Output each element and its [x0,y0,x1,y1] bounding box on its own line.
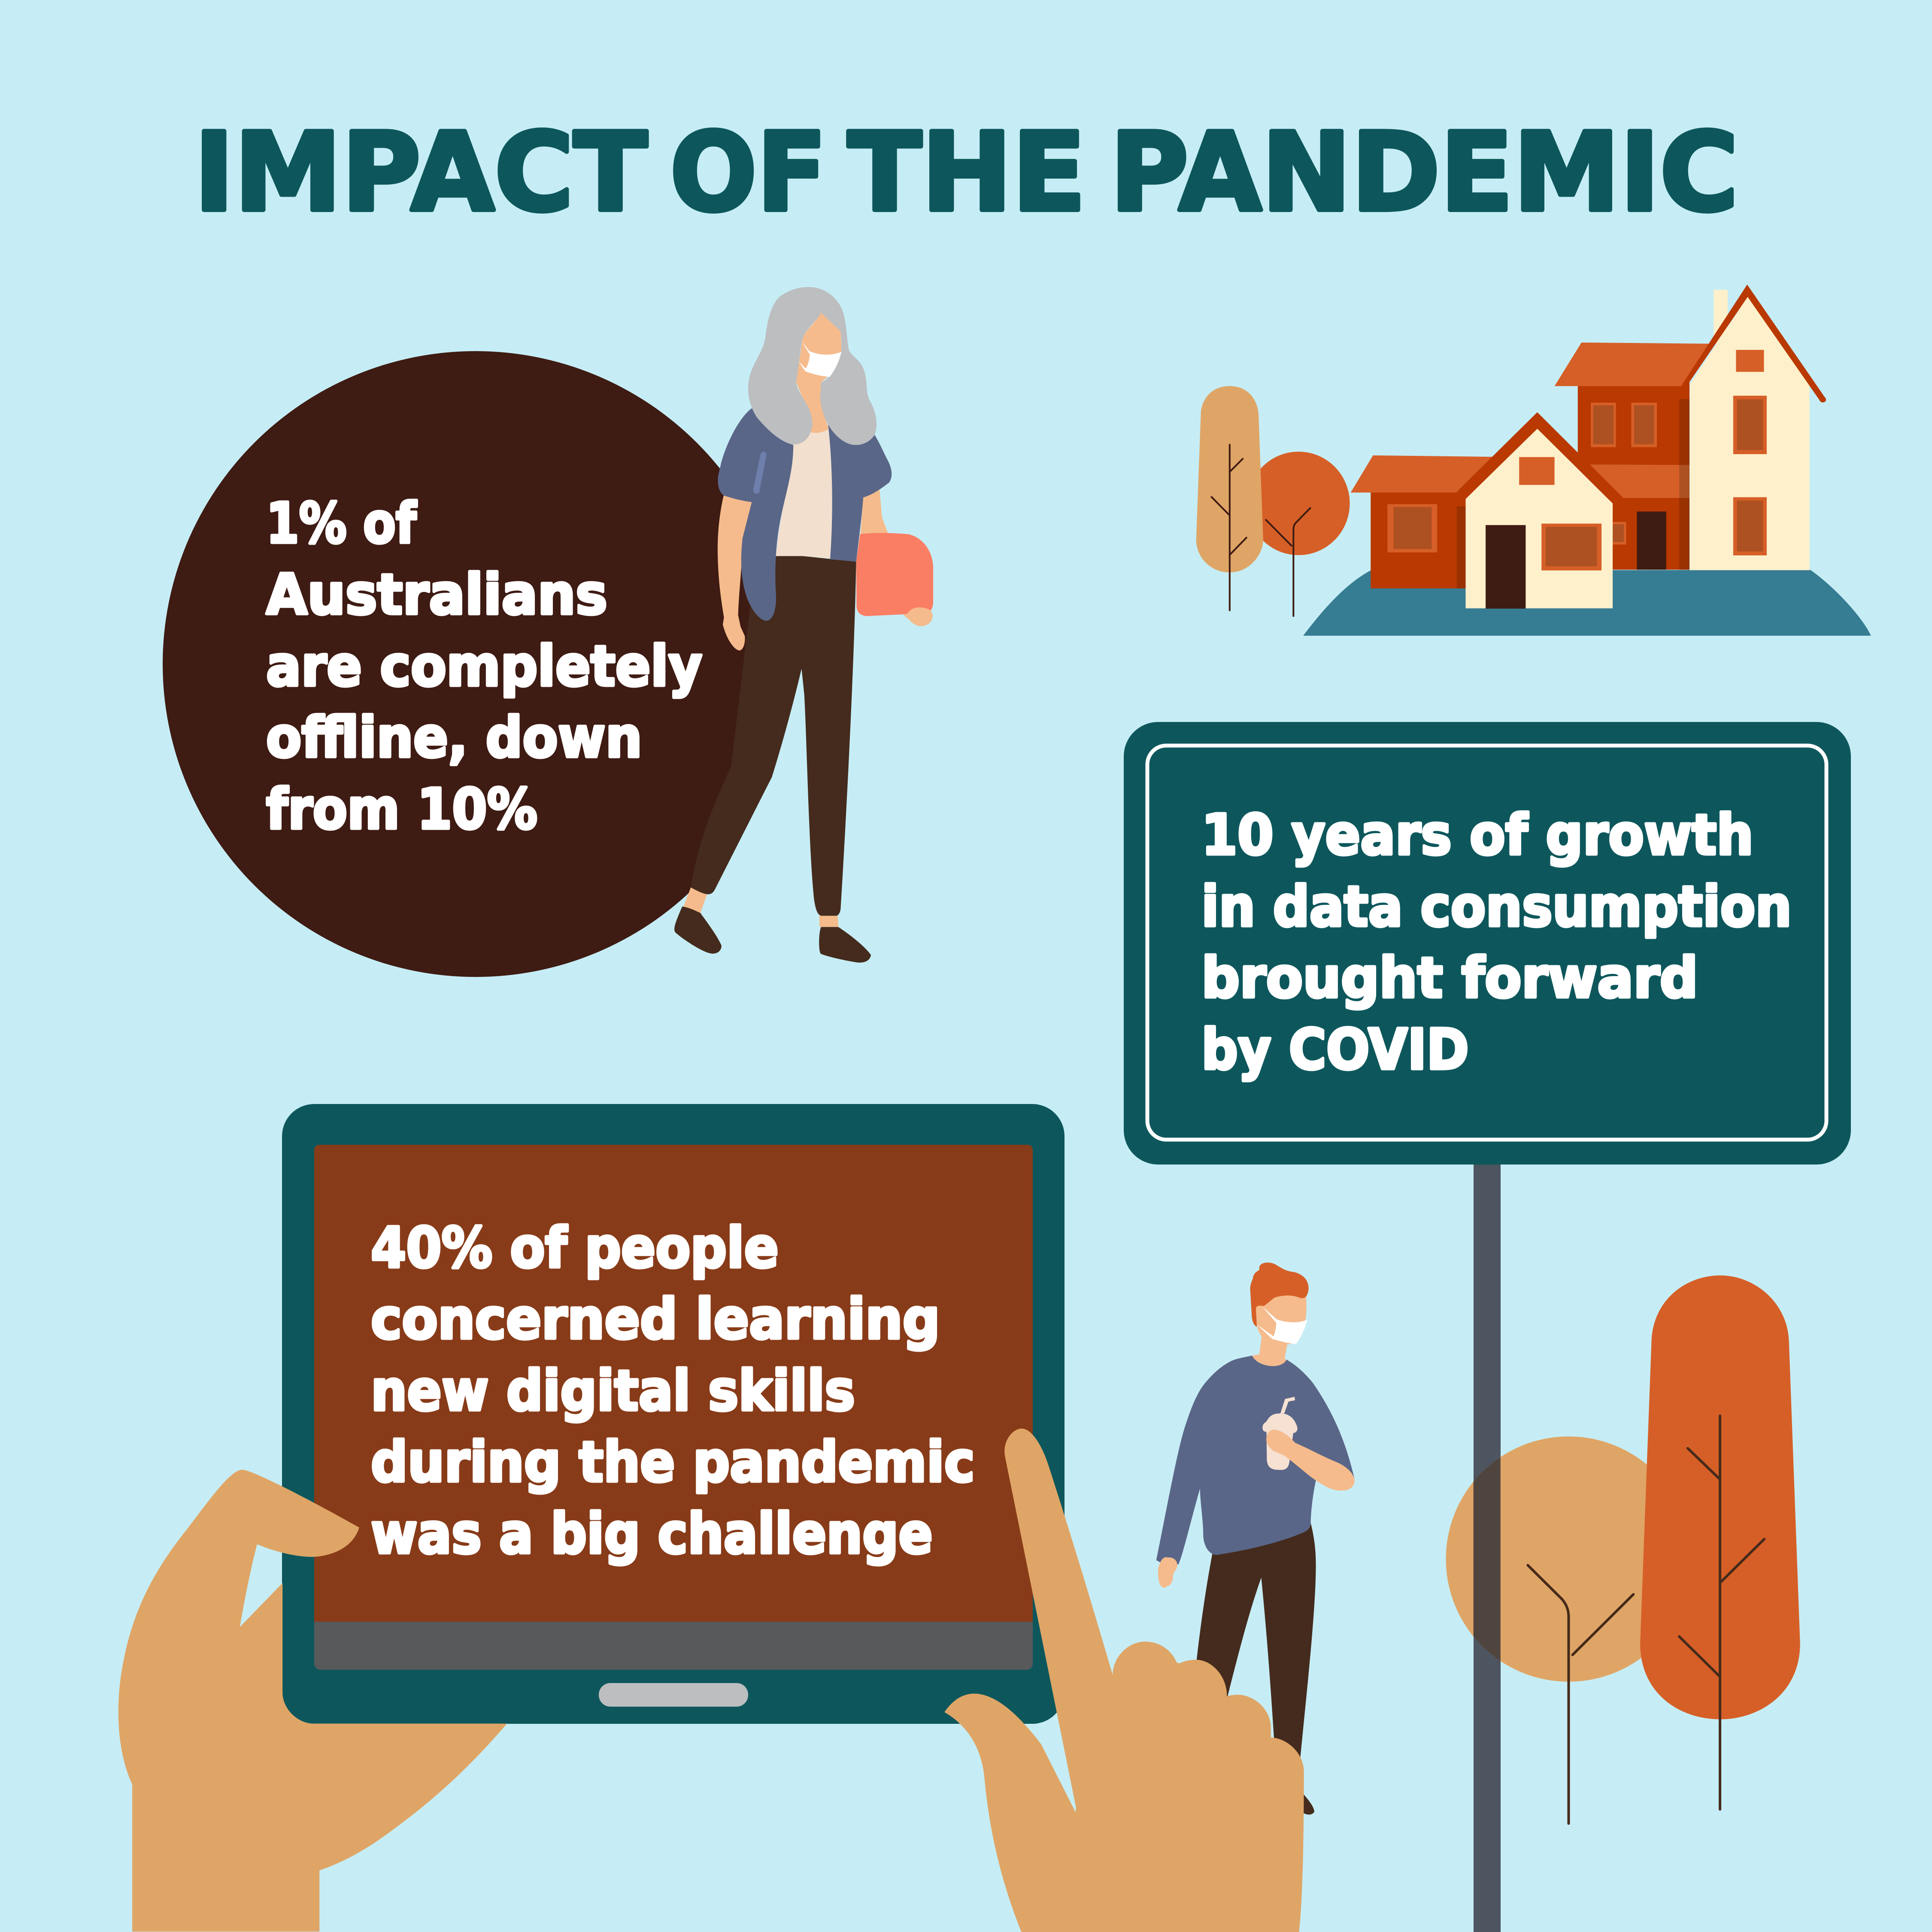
tree: tall orange [1640,1275,1800,1719]
icon: right hand pointing [944,1429,1304,1932]
house: left [1351,455,1494,588]
text: offline statistic: 1% of [266,491,417,556]
text: digital skills statistic: 40% of people [371,1215,779,1280]
icon: left hand holding tablet [118,1470,507,1932]
house: front [1454,412,1623,609]
house: back [1555,343,1711,570]
tree: round tan [1446,1436,1691,1682]
text: data consumption statistic: 10 years of growth [1201,802,1753,867]
text: digital skills statistic: was a big challenge [371,1501,933,1566]
text: digital skills statistic [371,1215,975,1566]
panel: tablet [282,1104,1065,1724]
text: offline statistic: Australians [266,562,607,627]
text: data consumption statistic: in data consumption [1201,874,1792,939]
title [194,110,1738,236]
title: IMPACT [194,110,647,236]
text: offline statistic [266,491,702,842]
figure: woman with mask and bag [674,287,933,963]
text: digital skills statistic: concerned learning [371,1286,940,1352]
house: tall [1679,285,1826,570]
text: offline statistic: are completely [266,634,702,699]
trees: bottom right [1446,1275,1800,1823]
tree: small orange [1247,452,1350,555]
text: offline statistic: from 10% [266,776,537,842]
panel: dark circle [163,351,789,977]
text: digital skills statistic: during the pandemic [371,1429,975,1495]
text: offline statistic: offline, down [266,705,642,770]
title: OF [670,110,827,236]
ground [1303,570,1871,636]
tree: tall tan [1196,386,1263,572]
tablet home button [599,1683,748,1707]
sign post [1474,1159,1501,1932]
text: data consumption statistic: by COVID [1201,1017,1469,1082]
text: digital skills statistic: new digital skills [371,1358,855,1423]
tablet screen [314,1145,1033,1670]
text: data consumption statistic: brought forward [1201,945,1698,1010]
title: THE [848,110,1086,236]
panel: road sign [1124,722,1851,1165]
text: data consumption statistic [1201,802,1792,1082]
figure: man with mask and cup [1156,1262,1355,1815]
title: PANDEMIC [1110,110,1738,236]
illustration: houses and trees [1196,285,1871,636]
